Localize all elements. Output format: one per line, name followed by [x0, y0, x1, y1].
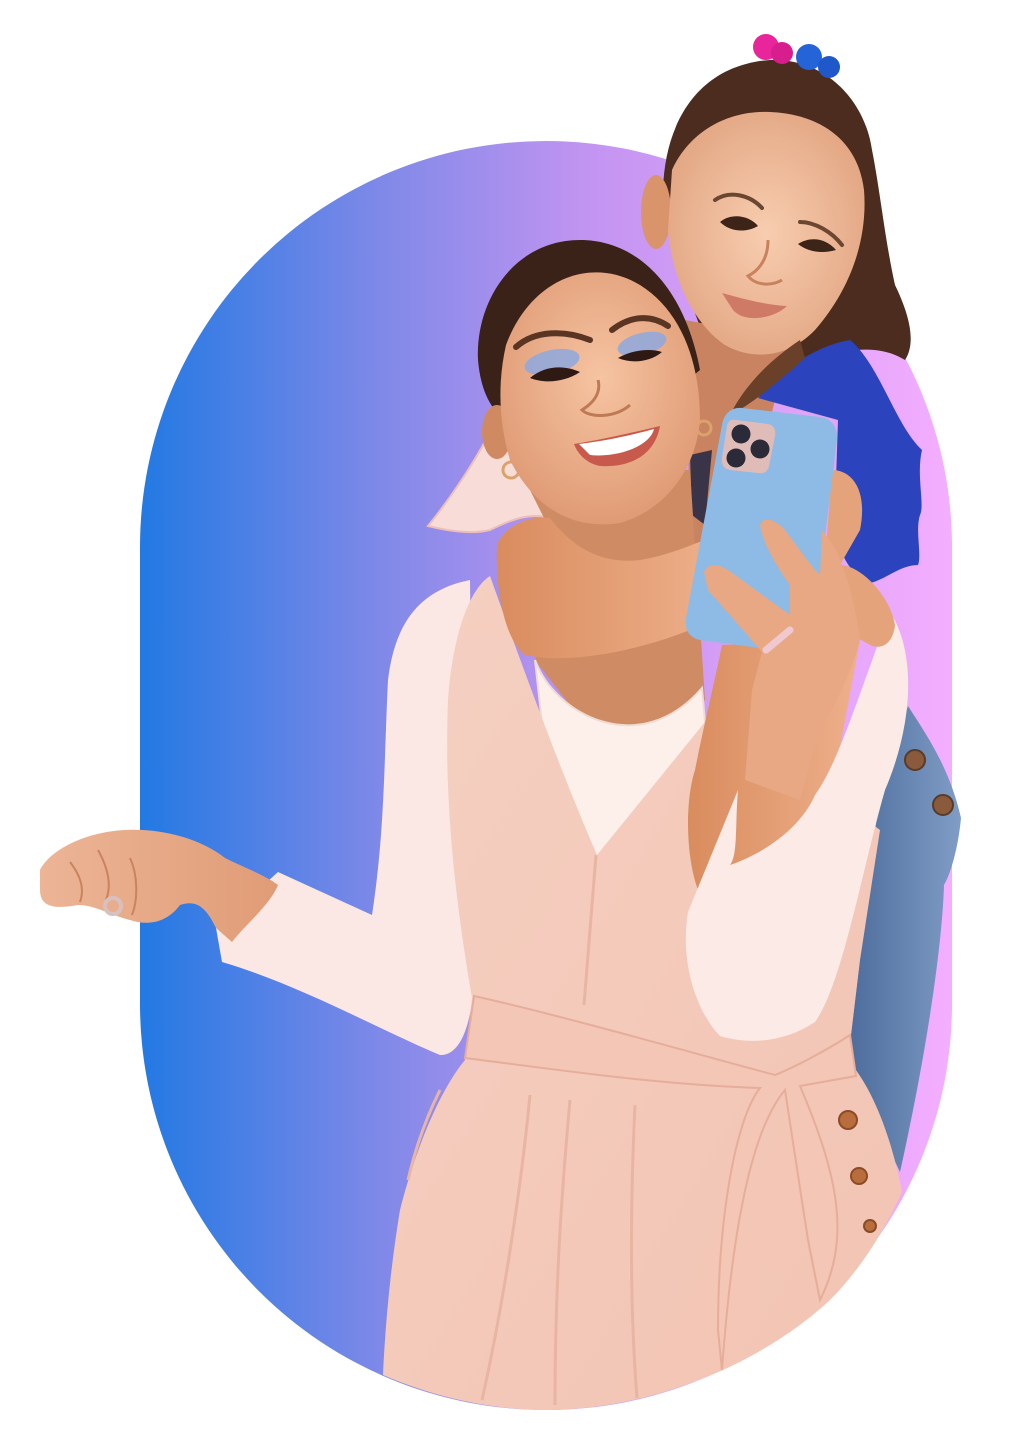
woman: eyebrows — [516, 318, 668, 347]
girl: dark clothing strip beside the woman's face — [690, 450, 712, 525]
girl: nose — [748, 240, 782, 284]
woman: ear and earring — [482, 405, 711, 478]
girl: ruffled blue sleeve — [758, 340, 922, 583]
girl: ear — [641, 175, 671, 249]
phone: camera module — [722, 420, 775, 473]
woman: open smile — [574, 426, 660, 466]
woman: outstretched hand — [40, 830, 278, 942]
woman: pink pinafore dress — [383, 576, 902, 1410]
woman: dress buttons — [839, 1111, 876, 1232]
gradient pill background — [140, 141, 952, 1410]
woman: neck — [520, 470, 705, 770]
woman: blue eyeshadow — [522, 327, 669, 380]
figure: woman — [40, 240, 908, 1410]
girl: forearm and fingers over the shoulder — [825, 470, 895, 647]
woman: right bell sleeve — [686, 612, 908, 1041]
woman: ring on outstretched hand — [105, 898, 121, 914]
girl: pink ruffled sleeve — [428, 436, 551, 532]
girl: scrunchie beads — [753, 34, 840, 78]
girl: overall buttons — [905, 750, 953, 815]
phone — [686, 408, 837, 652]
woman: waist sash — [465, 996, 856, 1370]
girl: arm around the woman's neck — [497, 517, 720, 658]
girl: neck and chest behind the phone — [685, 320, 790, 610]
woman: white undershirt — [535, 660, 710, 860]
girl: hair — [663, 60, 911, 410]
girl: denim overalls — [848, 706, 961, 1172]
phone: blue case — [686, 408, 837, 652]
woman: dress seams — [408, 855, 637, 1405]
figure: girl — [428, 34, 961, 1172]
woman: finger creases — [70, 850, 136, 915]
woman: left white sleeve and arm — [216, 580, 474, 1055]
woman: right forearm — [688, 640, 860, 905]
woman: nose — [582, 380, 630, 415]
woman: hair — [478, 240, 700, 420]
girl: eyes — [720, 216, 836, 252]
girl: shoulder hair strands — [730, 340, 805, 415]
woman: eyes — [530, 350, 662, 381]
girl: eyebrows — [715, 195, 842, 245]
woman: ring on phone hand — [766, 630, 790, 650]
girl: smiling lips — [722, 293, 787, 318]
woman: face — [500, 272, 700, 524]
woman: hand holding phone — [704, 520, 860, 800]
girl: face — [668, 112, 865, 355]
